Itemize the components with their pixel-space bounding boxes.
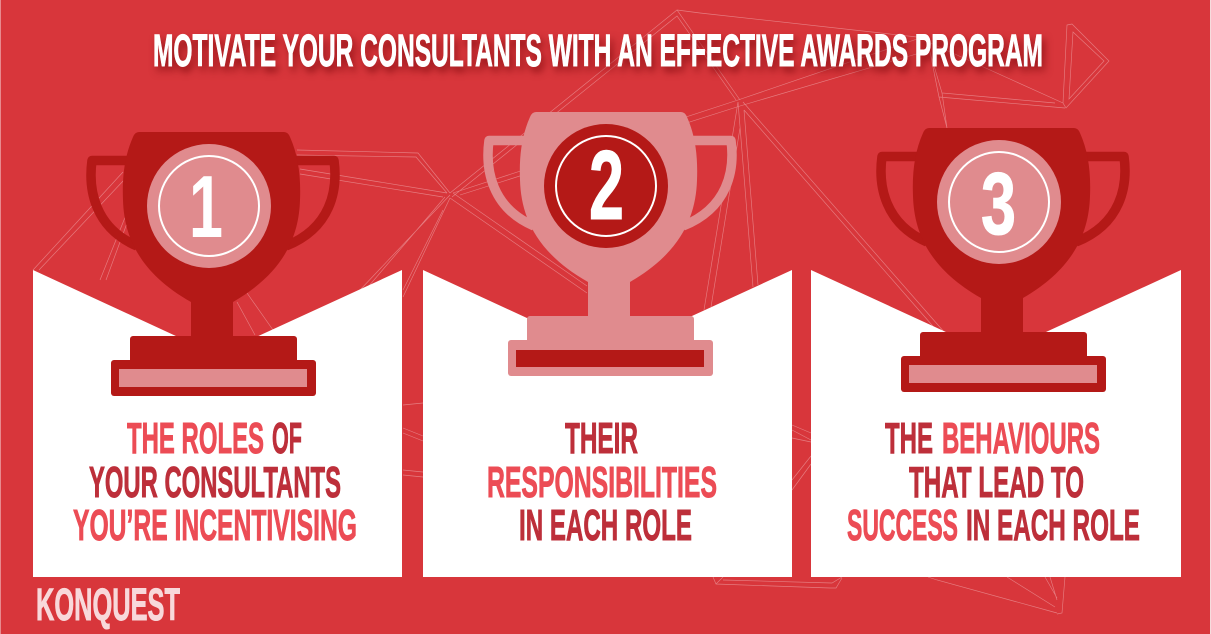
number 2: 2 bbox=[589, 130, 624, 240]
panel: card 1 bbox=[33, 270, 402, 577]
number 3: 3 bbox=[981, 154, 1016, 253]
text block: card 2: RESPONSIBILITIES bbox=[487, 459, 717, 507]
text block: card 3 bbox=[847, 415, 1140, 550]
logo: Konquest: KONQUEST bbox=[36, 579, 180, 630]
text block: card 2: THEIR bbox=[565, 415, 638, 463]
icon: trophy 2 bbox=[488, 112, 732, 376]
text block: card 2: IN EACH ROLE bbox=[519, 502, 692, 550]
text block: card 2 bbox=[487, 415, 717, 550]
number 1: 1 bbox=[189, 157, 223, 256]
panel: card 2 bbox=[423, 270, 792, 577]
text block: card 1 bbox=[73, 415, 357, 550]
text block: card 1: YOU’RE INCENTIVISING bbox=[73, 502, 357, 550]
text block: card 3: SUCCESS bbox=[847, 502, 958, 550]
panel: card 3 bbox=[811, 270, 1181, 577]
icon: trophy 1 bbox=[91, 132, 335, 396]
icon: trophy 3 bbox=[881, 128, 1125, 392]
text block: card 1: OF bbox=[272, 415, 302, 463]
text block: card 1: YOUR CONSULTANTS bbox=[89, 459, 341, 507]
text block: card 1: THE ROLES bbox=[127, 415, 264, 463]
text block: card 3: THE bbox=[885, 415, 933, 463]
